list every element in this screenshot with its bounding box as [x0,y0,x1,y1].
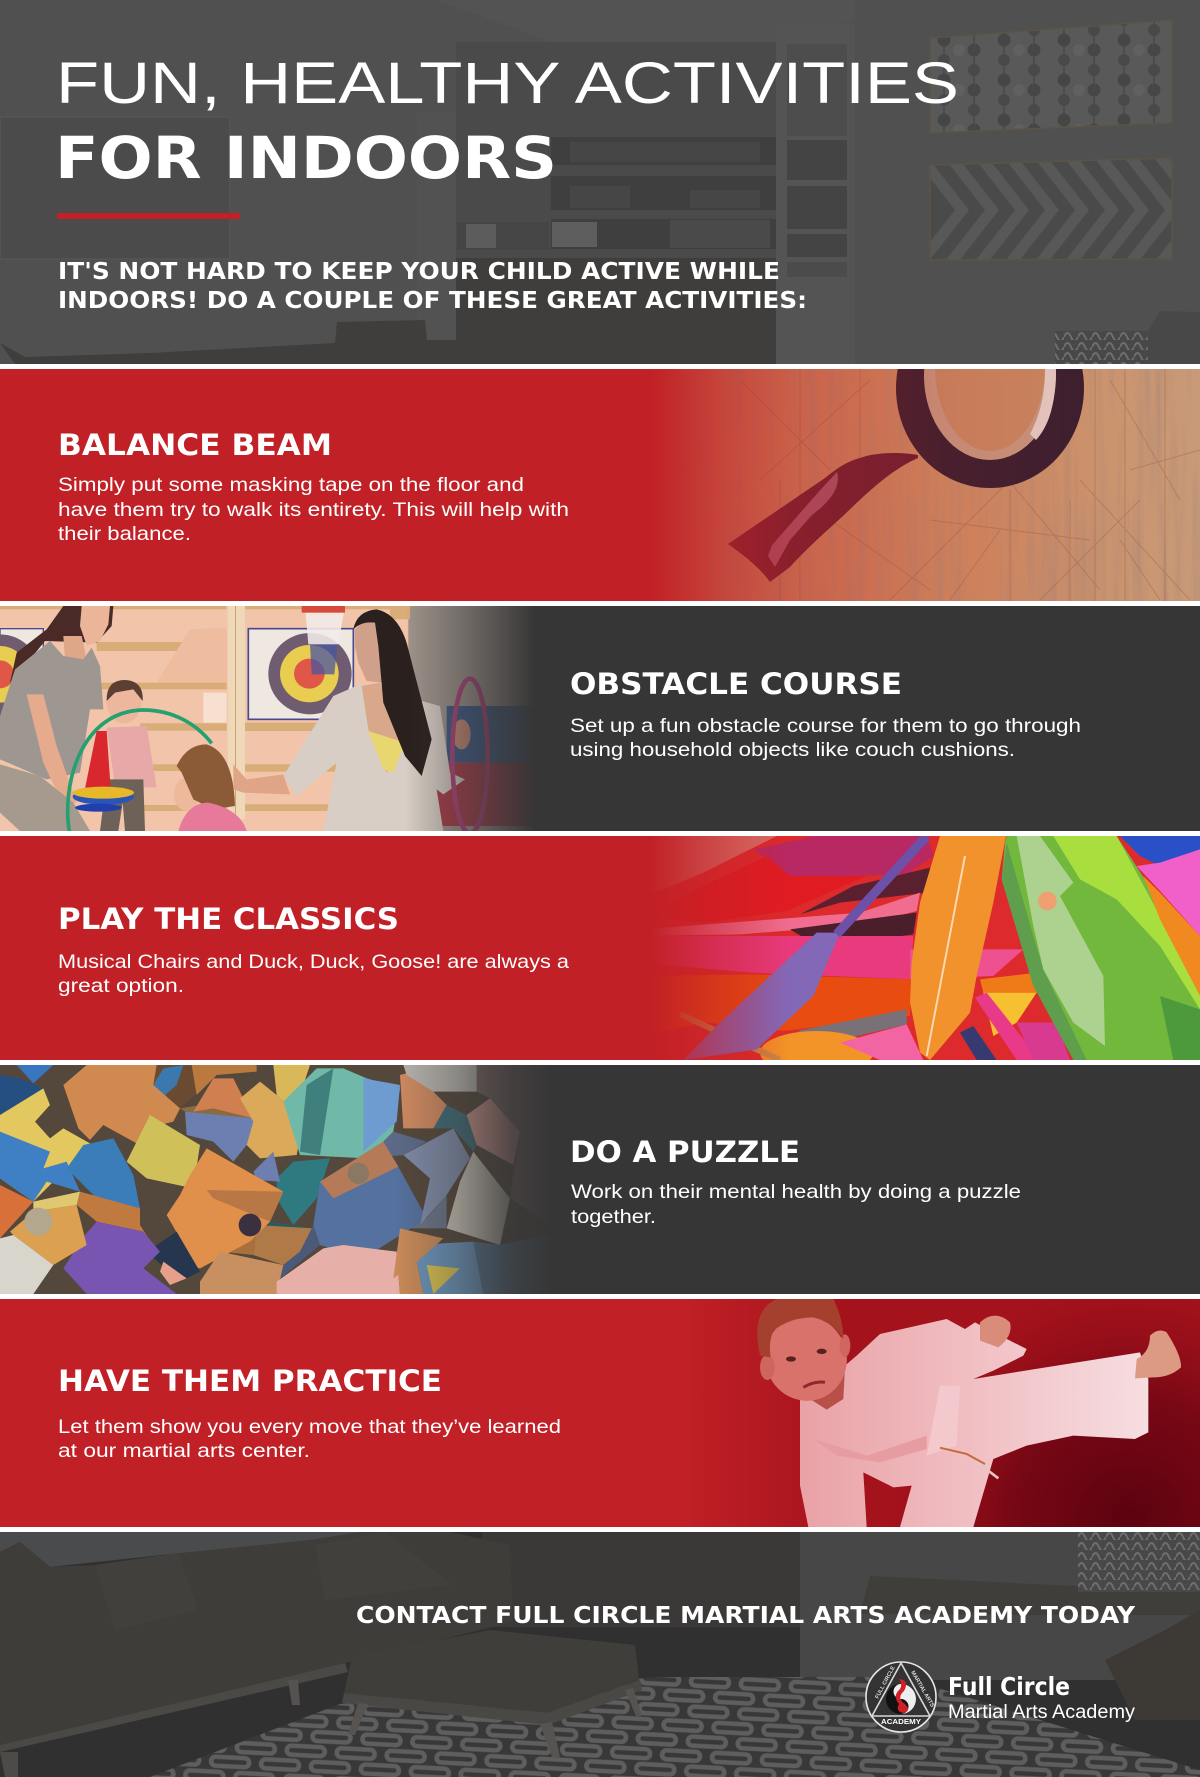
body text: their balance. [58,523,191,545]
body text: together. [571,1206,656,1228]
logo wordmark: Martial Arts Academy [948,1702,1136,1723]
left woman [10,606,113,683]
logo emblem: FULL CIRCLE [874,1665,897,1700]
heading: BALANCE BEAM [58,428,332,462]
chevron wall panel [915,150,1200,270]
intro text: INDOORS! DO A COUPLE OF THESE GREAT ACTIVITIES: [58,286,807,314]
logo wordmark: Full Circle [948,1672,1070,1701]
heading: DO A PUZZLE [570,1135,800,1169]
hoop [68,710,212,831]
body text: Set up a fun obstacle course for them to go through [570,715,1081,737]
title line 2: FOR INDOORS [55,124,557,192]
body text: Musical Chairs and Duck, Duck, Goose! are always a [58,951,569,973]
body text [571,1181,1021,1228]
dotted wall panel [930,20,1172,133]
body text [58,474,569,545]
logo emblem [866,1662,936,1732]
heading: PLAY THE CLASSICS [58,902,399,936]
image: child in white gi kicking [680,1299,1200,1527]
rug [150,1677,1200,1777]
image: teachers and toddlers in gym [0,606,537,833]
intro text [58,257,807,314]
image: puzzle pieces [0,1065,560,1294]
contact heading: CONTACT FULL CIRCLE MARTIAL ARTS ACADEMY TODAY [356,1601,1136,1629]
logo emblem: ACADEMY [881,1719,921,1726]
logo wordmark [948,1672,1136,1723]
footer background: sofa and rug [0,1532,1200,1777]
tape roll [896,369,1084,488]
footer panel [0,1532,1200,1777]
body text: Simply put some masking tape on the floor and [58,474,524,496]
logo [866,1662,1136,1732]
header background: living room [0,0,1200,364]
body text [58,1416,561,1462]
body text [570,715,1081,761]
body text: Work on their mental health by doing a puzzle [571,1181,1021,1203]
body text [58,951,569,997]
panel: play the classics [0,836,1200,1074]
body text: Let them show you every move that they’ve learned [58,1416,561,1438]
loose tape end [728,453,918,582]
body text: great option. [58,975,184,997]
decorative figurine [1105,1610,1200,1720]
panel: obstacle course [0,606,1200,833]
right woman [233,764,290,794]
image: colourful feathers [640,836,1200,1074]
title [55,51,959,192]
sofa [0,1532,513,1745]
toddler behind [106,690,142,724]
title underline [57,213,240,219]
logo emblem: MARTIAL ARTS [909,1670,935,1709]
header panel [0,0,1200,364]
heading: HAVE THEM PRACTICE [58,1364,442,1398]
cone and rings [85,731,111,789]
body text: at our martial arts center. [58,1440,310,1462]
intro text: IT'S NOT HARD TO KEEP YOUR CHILD ACTIVE WHILE [58,257,780,285]
body text: using household objects like couch cushions. [570,739,1015,761]
title line 1: FUN, HEALTHY ACTIVITIES [56,51,959,116]
image: masking tape on wood [666,369,1200,601]
body text: have them try to walk its entirety. This will help with [58,499,569,521]
heading: OBSTACLE COURSE [570,667,902,701]
toddler front [174,778,199,811]
panel: have them practice [0,1299,1200,1527]
panel: do a puzzle [0,1065,1200,1294]
ottoman [344,1630,639,1713]
panel: balance beam [0,369,1200,601]
